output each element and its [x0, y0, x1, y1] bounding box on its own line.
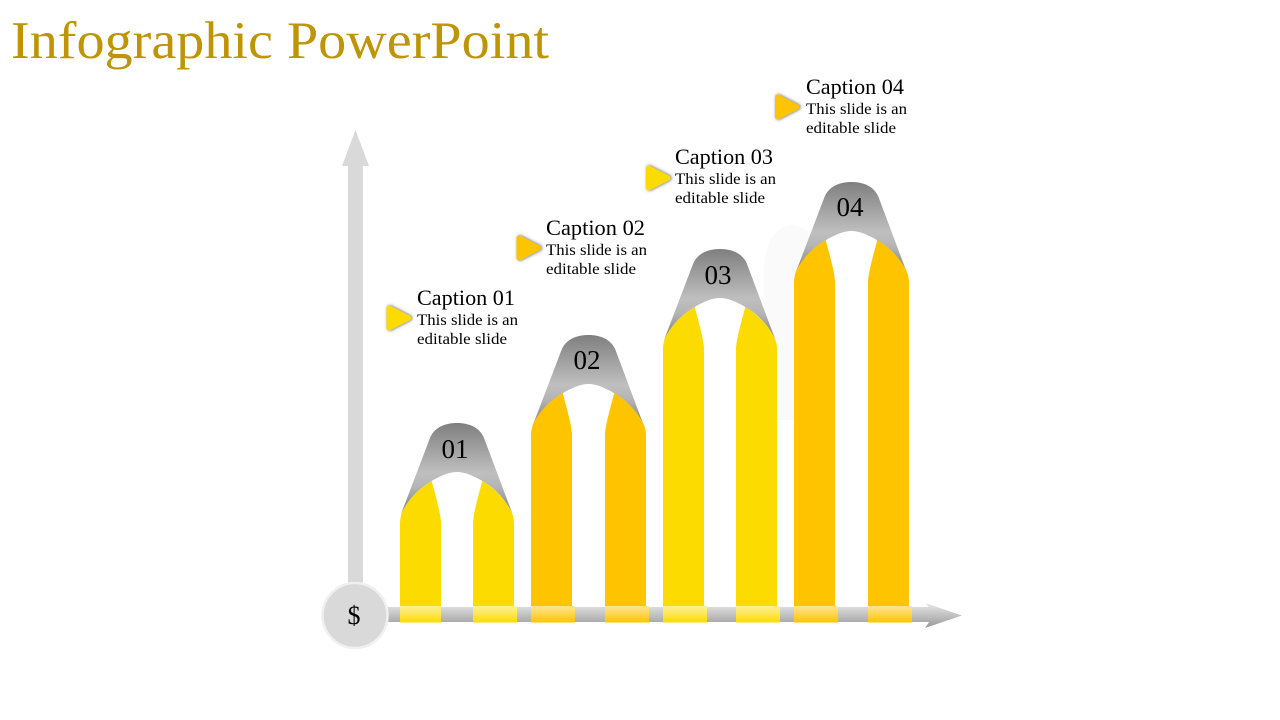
right bar 04: [868, 240, 909, 607]
callout 04: [778, 74, 907, 137]
body 02 text: editable slide: [546, 261, 636, 278]
caption 04 text: Caption 04: [806, 74, 904, 99]
number 02: 02: [574, 345, 600, 375]
number 03: 03: [704, 260, 732, 290]
body 03 text: editable slide: [675, 190, 765, 207]
left bar 01: [400, 481, 441, 607]
horizontal axis arrow: [385, 603, 962, 628]
body 03 text: This slide is an: [675, 171, 776, 188]
column 01: [400, 423, 514, 607]
dome 04: [796, 182, 907, 273]
left bar 04: [794, 240, 835, 607]
body 01 text: editable slide: [417, 331, 507, 348]
number 04: 04: [836, 192, 864, 222]
body 01 text: This slide is an: [417, 312, 518, 329]
dome 03: [664, 249, 776, 340]
dollar circle: $: [348, 601, 360, 630]
left bar 03: [663, 307, 704, 607]
body 01 text: [417, 312, 518, 348]
icon: play 01: [389, 308, 408, 328]
left bar 02: [531, 393, 572, 607]
vertical axis arrow: [342, 130, 369, 584]
body 04 text: editable slide: [806, 120, 896, 137]
dome 01: [401, 423, 512, 514]
axis segments: [400, 606, 912, 622]
body 04 text: This slide is an: [806, 101, 907, 118]
callout 02: [519, 215, 647, 278]
right bar 03: [736, 307, 777, 607]
body 02 text: This slide is an: [546, 242, 647, 259]
callout 01: [389, 285, 518, 348]
caption 02 text: Caption 02: [546, 215, 645, 240]
callout 03: [648, 144, 776, 207]
column 03: [663, 249, 777, 607]
column 04: [794, 182, 909, 607]
dollar circle: [322, 583, 388, 648]
title: Infographic PowerPoint: [11, 12, 549, 70]
body 02 text: [546, 242, 647, 278]
body 03 text: [675, 171, 776, 207]
caption 01 text: Caption 01: [417, 285, 515, 310]
icon: play 02: [519, 238, 538, 258]
icon: play 04: [778, 97, 797, 117]
column 02: [531, 335, 646, 607]
right bar 02: [605, 393, 646, 607]
faint ghost shape: [764, 225, 814, 420]
number 01: 01: [442, 434, 468, 464]
dome 02: [532, 335, 644, 426]
body 04 text: [806, 101, 907, 137]
icon: play 03: [648, 168, 668, 188]
caption 03 text: Caption 03: [675, 144, 773, 169]
right bar 01: [473, 481, 514, 607]
